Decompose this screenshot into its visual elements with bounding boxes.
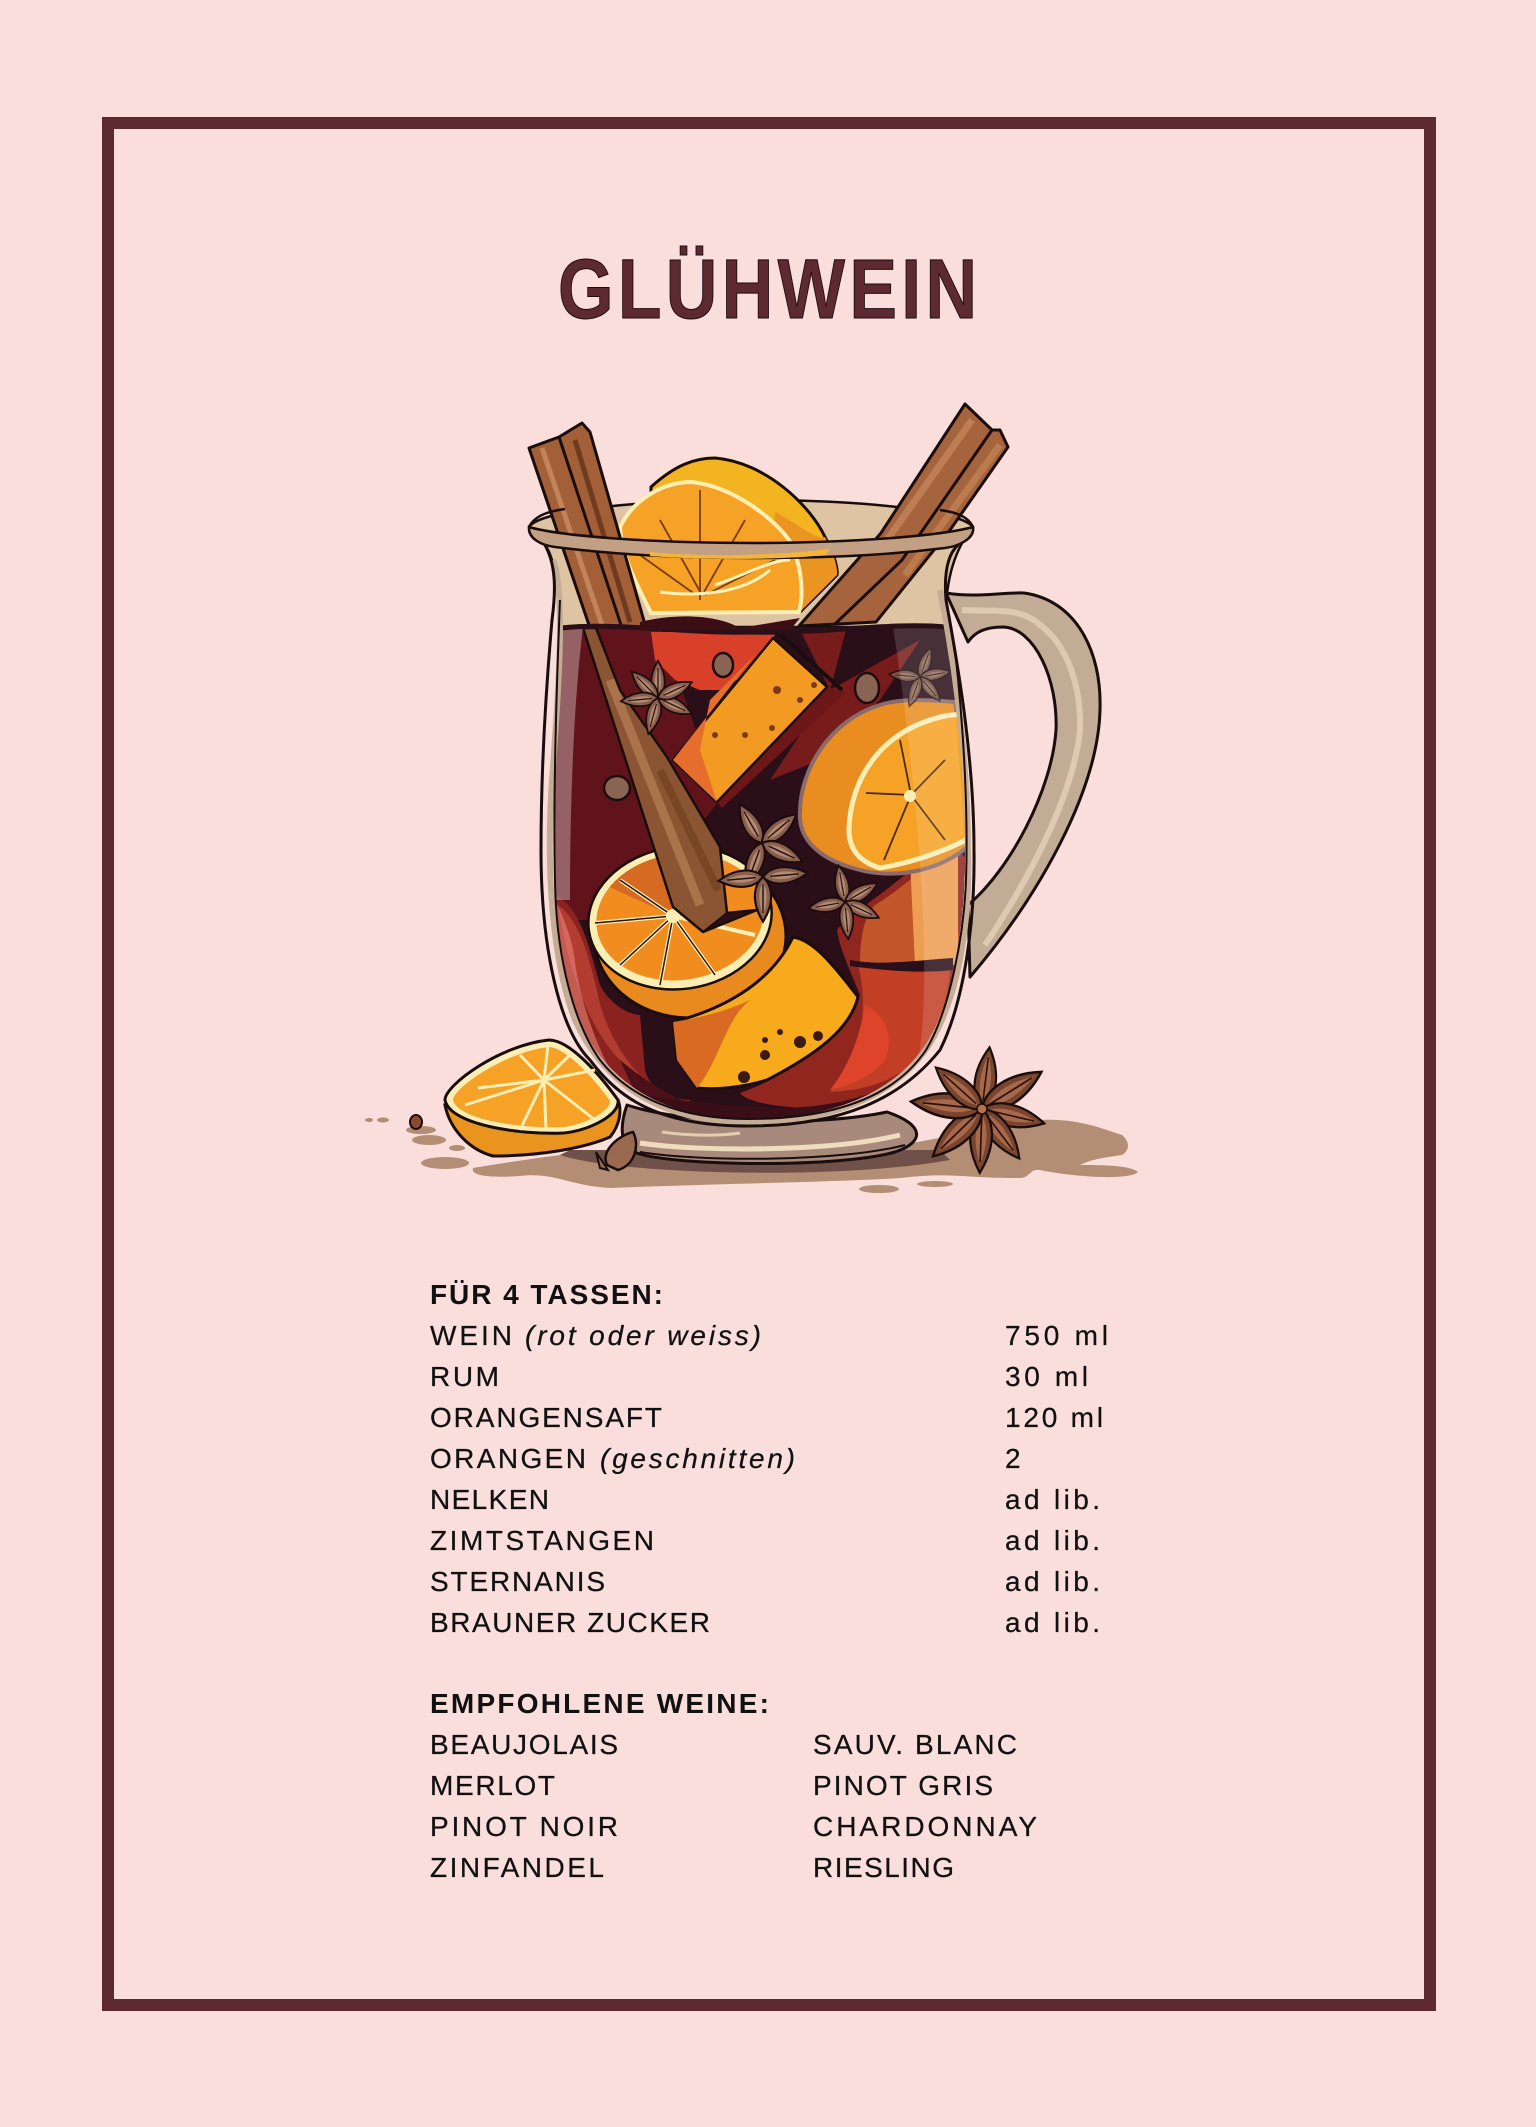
submerged star anise: [807, 864, 882, 940]
row: orange juice: ORANGENSAFT: [430, 1402, 662, 1433]
front rim of glass: [529, 509, 973, 559]
row: oranges: [430, 1443, 1021, 1474]
row: rum: 30 ml: [1005, 1361, 1088, 1392]
cloves: [604, 653, 879, 800]
wines row 1: SAUV. BLANC: [813, 1729, 1017, 1760]
glass foot: [622, 1105, 917, 1164]
row: orange juice: [430, 1402, 1103, 1433]
wines row 2: MERLOT: [430, 1770, 555, 1801]
ingredients list: [430, 1320, 1108, 1638]
row: oranges: (geschnitten): [600, 1443, 795, 1474]
row: oranges: 2: [1005, 1443, 1021, 1474]
lower left orange, face: [579, 835, 781, 1001]
wine upper-right tint: [770, 630, 920, 780]
submerged star anise: [733, 800, 806, 888]
row: wine: [430, 1320, 1108, 1351]
clove on table, right of orange: [596, 1132, 636, 1170]
glass interior above the wine: [529, 500, 973, 627]
wine lower-left tint: [556, 896, 690, 1102]
row: brown sugar: BRAUNER ZUCKER: [430, 1607, 710, 1638]
wines row 3: [430, 1811, 1037, 1842]
wines row 1: BEAUJOLAIS: [430, 1729, 618, 1760]
submerged star anise: [620, 661, 695, 736]
row: cinnamon sticks: [430, 1525, 1100, 1556]
right orange, face: [849, 714, 985, 868]
outer frame: [108, 123, 1430, 2005]
clove on table, left of orange: [410, 1115, 422, 1129]
wine and contents: [555, 627, 965, 1118]
wines row 4: [430, 1852, 954, 1883]
row: wine: WEIN: [430, 1320, 512, 1351]
wines row 2: PINOT GRIS: [813, 1770, 993, 1801]
wine surface line: [561, 626, 946, 632]
lower left orange, rind: [594, 891, 788, 1019]
wines row 4: ZINFANDEL: [430, 1852, 604, 1883]
row: star anise: STERNANIS: [430, 1566, 605, 1597]
title: GLÜHWEIN: [558, 241, 977, 336]
row: wine: (rot oder weiss): [525, 1320, 761, 1351]
cinnamon stick, left, above wine: [529, 423, 646, 628]
submerged star anise: [889, 646, 952, 708]
row: orange juice: 120 ml: [1005, 1402, 1103, 1433]
spilled shadow puddle: [365, 1118, 1138, 1193]
cinnamon stick, right, above wine: [799, 404, 1008, 626]
row: cloves: ad lib.: [1005, 1484, 1100, 1515]
glass wall: [541, 545, 974, 1126]
floating orange slice, rind: [651, 458, 837, 612]
yellow orange chunk: [673, 937, 858, 1089]
cut orange half on table: [445, 1040, 620, 1156]
red-orange mass, lower right: [740, 854, 965, 1108]
row: oranges: ORANGEN: [430, 1443, 586, 1474]
wine upper-left tint: [555, 627, 720, 920]
cinnamon stick, submerged: [583, 628, 757, 932]
row: star anise: ad lib.: [1005, 1566, 1100, 1597]
row: wine: 750 ml: [1005, 1320, 1108, 1351]
illustration: mug of mulled wine: [365, 404, 1138, 1193]
wines row 4: RIESLING: [813, 1852, 954, 1883]
row: rum: RUM: [430, 1361, 499, 1392]
right orange, rind: [800, 700, 975, 874]
orange block: [673, 634, 846, 808]
row: cinnamon sticks: ad lib.: [1005, 1525, 1100, 1556]
wine bottom shade: [640, 1075, 905, 1120]
ingredients heading: FÜR 4 TASSEN:: [430, 1279, 663, 1310]
row: cinnamon sticks: ZIMTSTANGEN: [430, 1525, 654, 1556]
recommended wines list: [430, 1729, 1037, 1883]
row: brown sugar: [430, 1607, 1100, 1638]
wines row 3: CHARDONNAY: [813, 1811, 1037, 1842]
row: brown sugar: ad lib.: [1005, 1607, 1100, 1638]
row: cloves: [430, 1484, 1100, 1515]
row: cloves: NELKEN: [430, 1484, 549, 1515]
mug handle: [946, 593, 1100, 977]
large star anise: [910, 1046, 1048, 1173]
row: star anise: [430, 1566, 1100, 1597]
wines row 2: [430, 1770, 993, 1801]
glass reflections: [893, 627, 966, 1075]
recommended wines heading: EMPFOHLENE WEINE:: [430, 1688, 769, 1719]
floating orange slice, face: [620, 482, 802, 613]
wines row 3: PINOT NOIR: [430, 1811, 618, 1842]
row: rum: [430, 1361, 1088, 1392]
submerged star anise: [718, 865, 808, 922]
wines row 1: [430, 1729, 1017, 1760]
